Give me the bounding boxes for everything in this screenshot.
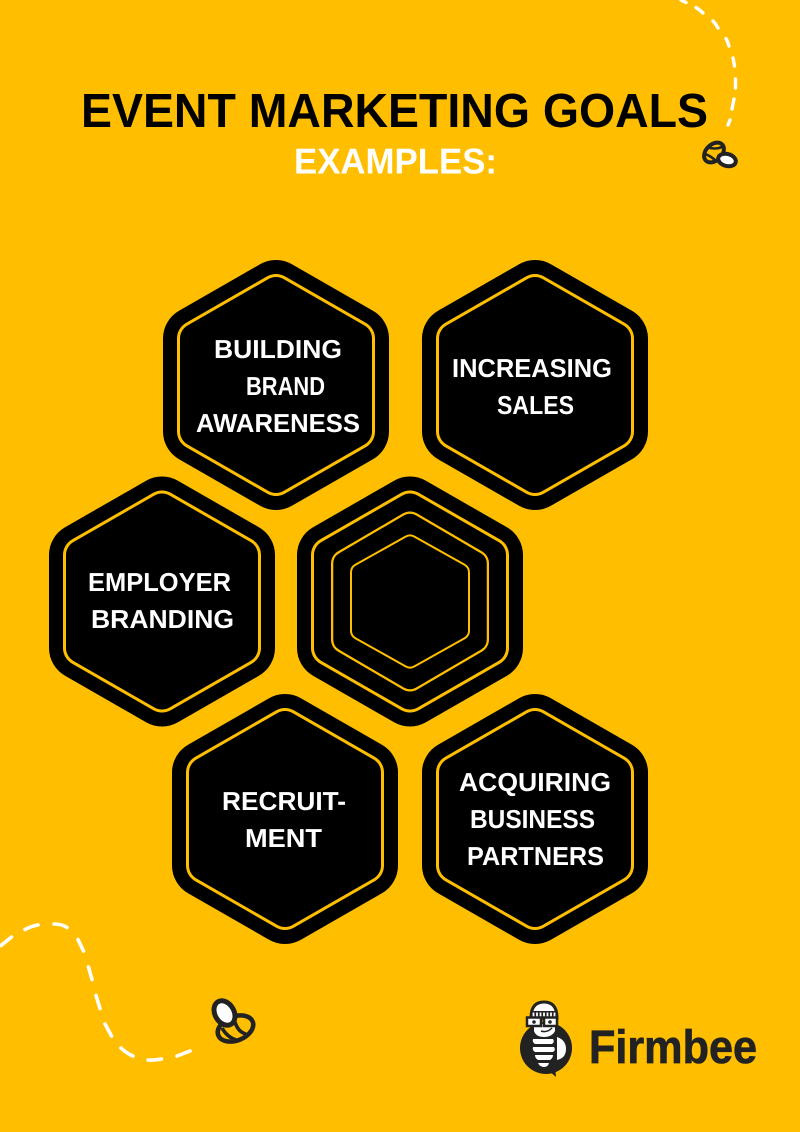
hexagon: building brand awareness: BUILDING bbox=[214, 334, 342, 364]
hexagon: employer branding bbox=[81, 508, 243, 694]
hexagon: employer branding: EMPLOYER bbox=[88, 567, 231, 597]
hexagon: acquiring business partners: PARTNERS bbox=[467, 841, 604, 871]
subtitle: EXAMPLES: bbox=[294, 140, 497, 182]
dashed flight path: bottom left bbox=[1, 924, 190, 1060]
hexagon: centre concentric rings bbox=[329, 508, 491, 694]
hexagon: building brand awareness bbox=[195, 292, 360, 478]
dashed flight path: top right bbox=[681, 0, 736, 125]
title: EVENT MARKETING GOALS bbox=[81, 85, 708, 138]
hexagon: increasing sales: SALES bbox=[497, 390, 574, 420]
hexagon: acquiring business partners bbox=[454, 726, 616, 912]
hexagon: acquiring business partners: ACQUIRING bbox=[459, 767, 611, 797]
logo wordmark: Firmbee bbox=[589, 1020, 757, 1073]
hexagon: recruitment bbox=[204, 726, 366, 912]
icon: small bee top right bbox=[700, 139, 737, 168]
hexagon: increasing sales: INCREASING bbox=[452, 353, 612, 383]
logo: Firmbee mascot and wordmark bbox=[520, 1002, 757, 1077]
hexagon: acquiring business partners: BUSINESS bbox=[470, 804, 595, 834]
hexagon: building brand awareness: AWARENESS bbox=[196, 408, 360, 438]
hexagon: recruitment: RECRUIT- bbox=[222, 786, 346, 816]
icon: bee bottom left bbox=[210, 997, 257, 1047]
hexagon: recruitment: MENT bbox=[245, 823, 322, 853]
logo mascot bbox=[520, 1002, 572, 1077]
hexagon: employer branding: BRANDING bbox=[91, 604, 234, 634]
hexagon: increasing sales bbox=[452, 292, 616, 478]
hexagon: building brand awareness: BRAND bbox=[246, 371, 325, 401]
